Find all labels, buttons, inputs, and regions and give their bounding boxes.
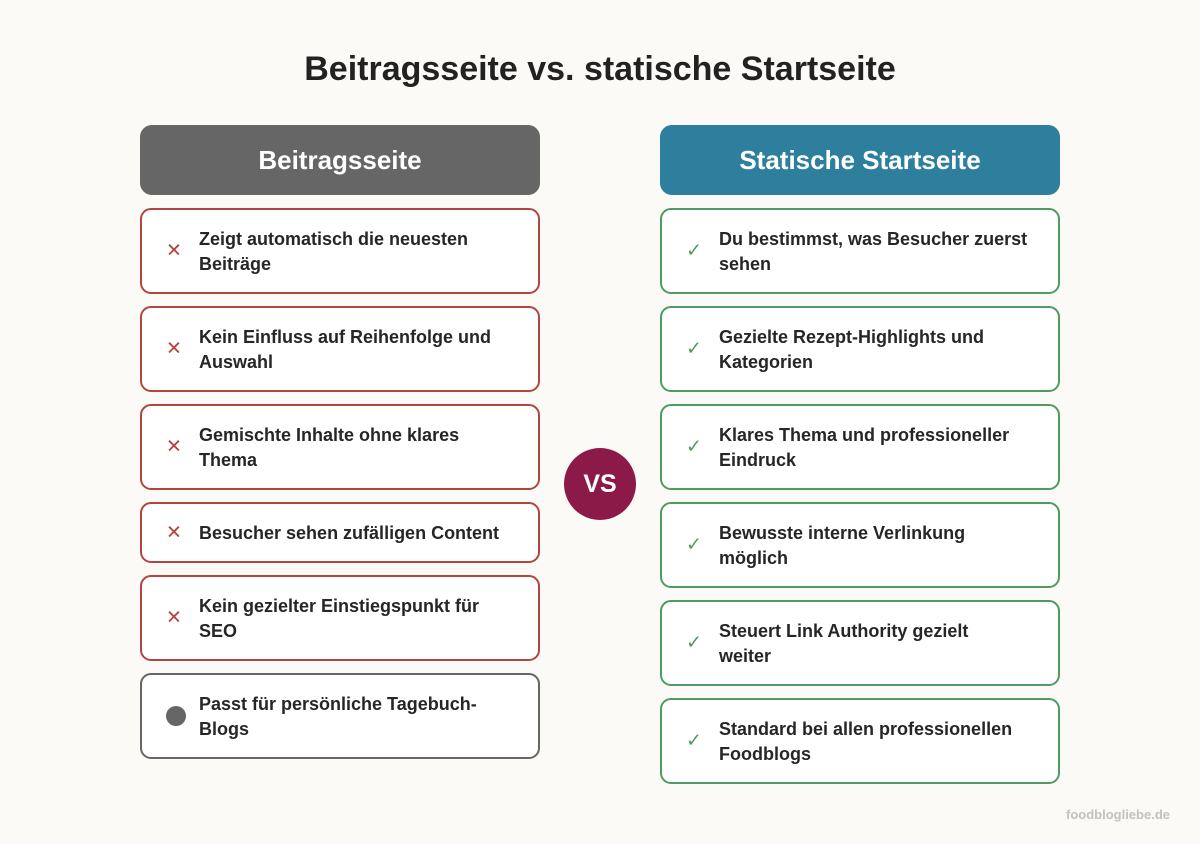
- vs badge: VS: [583, 470, 617, 498]
- left item 3: Gemischte Inhalte ohne klares Thema: [199, 425, 459, 470]
- left item 4: [140, 502, 540, 563]
- left item 2: ✕: [166, 338, 182, 360]
- left item 1: ✕: [166, 240, 182, 262]
- vs badge: [564, 448, 636, 520]
- right item 5: [660, 600, 1060, 686]
- right item 6: Standard bei allen professionellen Foodblogs: [719, 719, 1012, 764]
- footer credit: foodblogliebe.de: [1066, 807, 1170, 822]
- left item 3: [140, 404, 540, 490]
- right item 2: ✓: [686, 338, 702, 360]
- left item 2: Kein Einfluss auf Reihenfolge und Auswahl: [199, 327, 491, 372]
- right item 4: ✓: [686, 534, 702, 556]
- header: Statische Startseite: Statische Startseite: [739, 145, 981, 175]
- right item 3: [660, 404, 1060, 490]
- right item 3: ✓: [686, 436, 702, 458]
- right item 3: Klares Thema und professioneller Eindruck: [719, 425, 1009, 470]
- right item 1: [660, 208, 1060, 294]
- right item 4: [660, 502, 1060, 588]
- header: Beitragsseite: Beitragsseite: [258, 145, 422, 175]
- left item 2: [140, 306, 540, 392]
- right item 1: Du bestimmst, was Besucher zuerst sehen: [719, 229, 1027, 274]
- left item 3: ✕: [166, 436, 182, 458]
- title: Beitragsseite vs. statische Startseite: [304, 50, 896, 88]
- left item 1: Zeigt automatisch die neuesten Beiträge: [199, 229, 468, 274]
- left item 4: ✕: [166, 522, 182, 543]
- right item 5: ✓: [686, 632, 702, 654]
- left item 1: [140, 208, 540, 294]
- left item 6: Passt für persönliche Tagebuch-Blogs: [199, 694, 477, 739]
- left item 5: ✕: [166, 608, 182, 628]
- right item 2: [660, 306, 1060, 392]
- right item 5: Steuert Link Authority gezielt: [719, 621, 968, 641]
- header: Statische Startseite: [660, 125, 1060, 195]
- left item 4: Besucher sehen zufälligen Content: [199, 522, 499, 542]
- header: Beitragsseite: [140, 125, 540, 195]
- right item 6: [660, 698, 1060, 784]
- right item 5: weiter: [719, 646, 771, 666]
- left item 6: [140, 673, 540, 759]
- right item 6: ✓: [686, 730, 702, 752]
- right item 1: ✓: [686, 240, 702, 262]
- left item 5: [140, 575, 540, 661]
- left item 5: Kein gezielter Einstiegspunkt für SEO: [199, 596, 479, 641]
- right item 4: Bewusste interne Verlinkung möglich: [719, 523, 965, 568]
- right item 2: Gezielte Rezept-Highlights und Kategorien: [719, 327, 984, 372]
